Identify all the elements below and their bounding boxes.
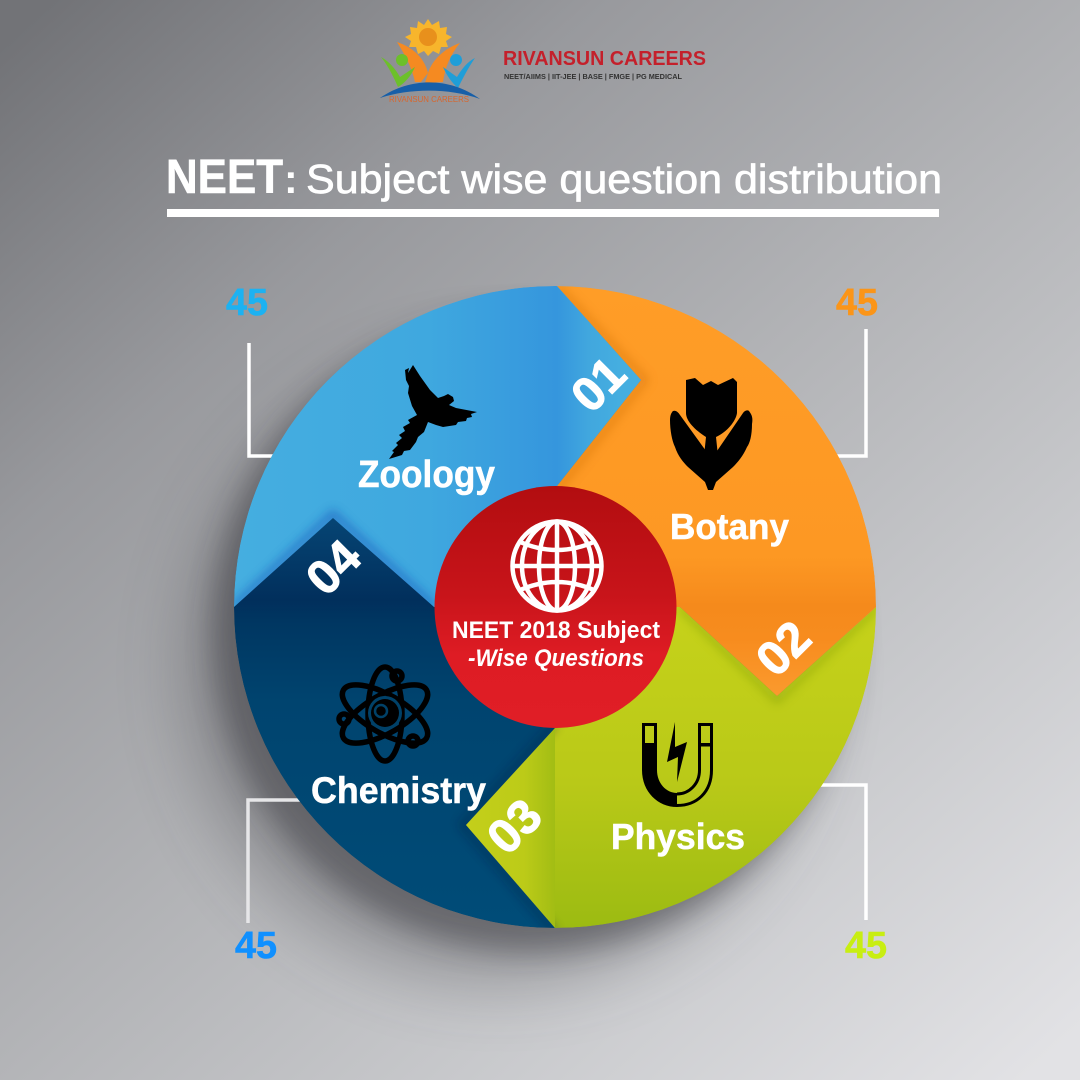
logo name: RIVANSUN CAREERS bbox=[503, 48, 706, 70]
pie chart bbox=[234, 286, 876, 932]
centre circle bbox=[434, 486, 676, 728]
title: : bbox=[284, 156, 298, 202]
label: zoology: Zoology bbox=[358, 454, 495, 496]
label: chemistry: Chemistry bbox=[311, 770, 486, 811]
icon: tulip bbox=[670, 378, 752, 490]
icon: bird bbox=[389, 365, 477, 459]
segment: physics bbox=[555, 607, 876, 928]
bracket bbox=[835, 329, 866, 456]
logo bbox=[380, 19, 706, 104]
segment: botany bbox=[555, 286, 876, 696]
value: 45 zoology: 45 bbox=[226, 282, 268, 324]
label: botany: Botany bbox=[670, 506, 789, 547]
callout: chemistry bbox=[235, 800, 305, 967]
centre label: NEET 2018 Subject bbox=[452, 617, 660, 644]
title bbox=[166, 151, 942, 204]
icon: magnet bbox=[642, 722, 712, 807]
segment: chemistry bbox=[234, 518, 555, 928]
logo icon: sun bbox=[405, 19, 452, 56]
callout: zoology bbox=[226, 282, 280, 456]
number 04: 04 bbox=[296, 530, 372, 606]
logo small text: RIVANSUN CAREERS bbox=[389, 95, 469, 104]
flap 01: 01 bbox=[561, 347, 637, 423]
callout: botany bbox=[835, 282, 878, 456]
bracket bbox=[249, 343, 280, 456]
value: 45 physics: 45 bbox=[845, 925, 887, 967]
icon: globe bbox=[512, 522, 602, 610]
title: Subject wise question distribution bbox=[306, 156, 942, 202]
logo icon: figures bbox=[380, 42, 480, 99]
flap 03 bbox=[466, 728, 555, 928]
value: 45 chemistry: 45 bbox=[235, 925, 277, 967]
segment: zoology bbox=[234, 286, 557, 607]
bracket bbox=[820, 785, 866, 920]
callout: physics bbox=[820, 785, 887, 967]
pie shadow bbox=[186, 312, 853, 982]
number 02: 02 bbox=[746, 611, 822, 687]
label: physics: Physics bbox=[611, 816, 745, 857]
flap 03: 03 bbox=[477, 789, 553, 865]
logo tagline: NEET/AIIMS | IIT-JEE | BASE | FMGE | PG MEDICAL bbox=[504, 72, 682, 81]
centre circle: -Wise Questions bbox=[468, 645, 644, 672]
bracket bbox=[248, 800, 305, 923]
title underline bbox=[167, 209, 939, 217]
value: 45 botany: 45 bbox=[836, 282, 878, 324]
title: NEET bbox=[166, 151, 283, 204]
flap 01 bbox=[557, 286, 641, 486]
icon: atom bbox=[334, 667, 436, 761]
